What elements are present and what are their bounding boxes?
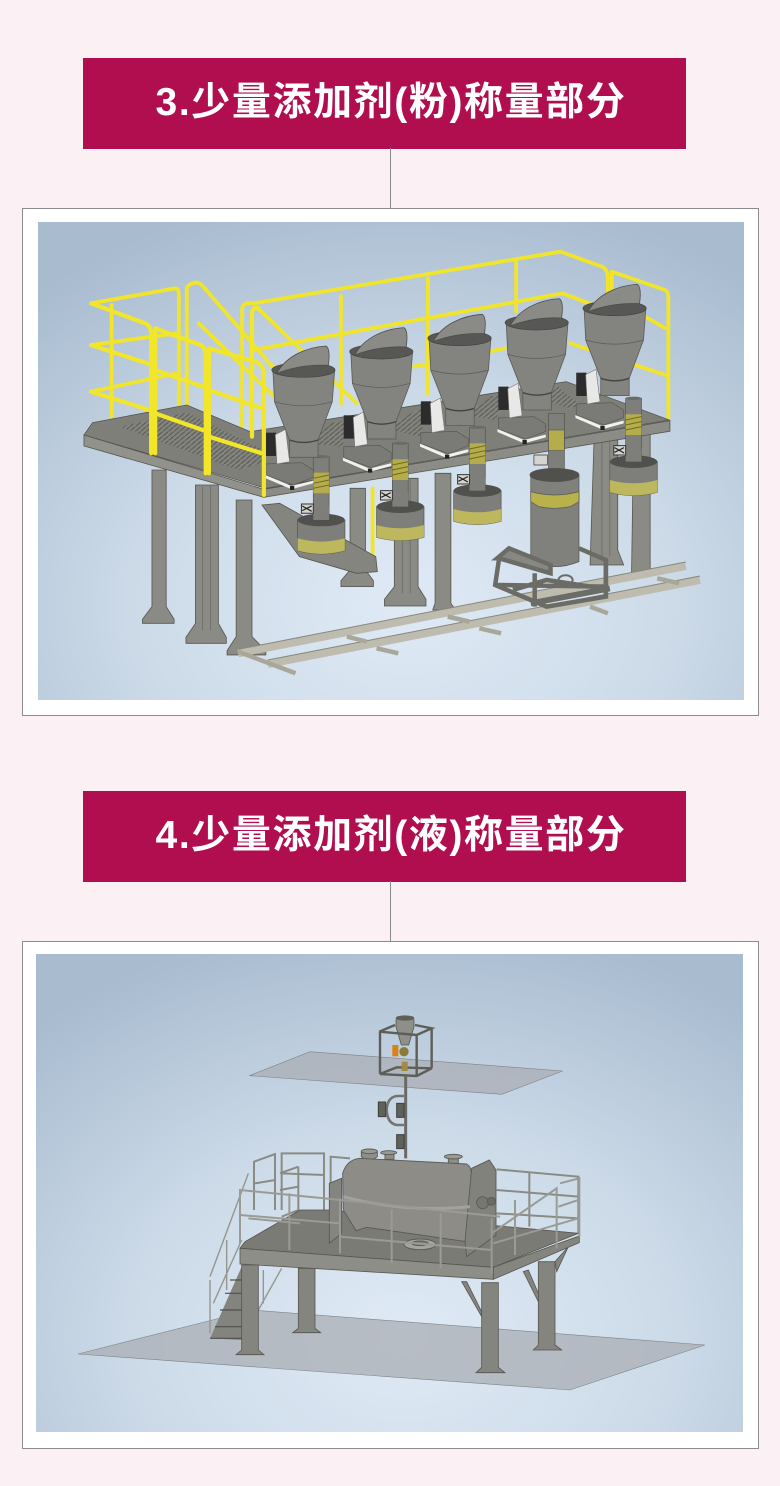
staircase [210,1173,282,1340]
front handrails [91,303,264,495]
pipework and instruments [378,1076,406,1158]
lower pipes and bag sections [297,397,657,554]
illustration: powder additive platform [38,222,744,700]
tall collection drum [530,413,579,567]
diagonal brace under platform [262,503,377,573]
floor planes [78,1052,705,1390]
front platform legs [236,1265,505,1373]
front guard rails [240,1178,579,1273]
back guard rails [254,1153,578,1233]
rails [238,562,700,673]
mixer tank [329,1149,496,1257]
bag cart [495,548,610,607]
connector: heading 3 to panel [390,148,391,208]
platform deck [84,382,670,497]
five hoppers [272,284,646,457]
panel: powder additive weighing [22,208,759,716]
scale units [265,369,624,490]
illustration: liquid additive platform [36,954,743,1432]
panel: liquid additive weighing [22,941,759,1449]
heading: section 3: 3.少量添加剂(粉)称量部分 [156,81,626,124]
connector: heading 4 to panel [390,881,391,941]
support legs [142,433,653,655]
upper dosing frame [379,1015,432,1076]
platform legs [293,1247,568,1350]
platform deck [240,1210,579,1279]
back handrails [91,252,668,557]
heading: section 4 [83,791,686,882]
heading: section 3 [83,58,686,149]
heading: section 4: 4.少量添加剂(液)称量部分 [156,814,626,857]
